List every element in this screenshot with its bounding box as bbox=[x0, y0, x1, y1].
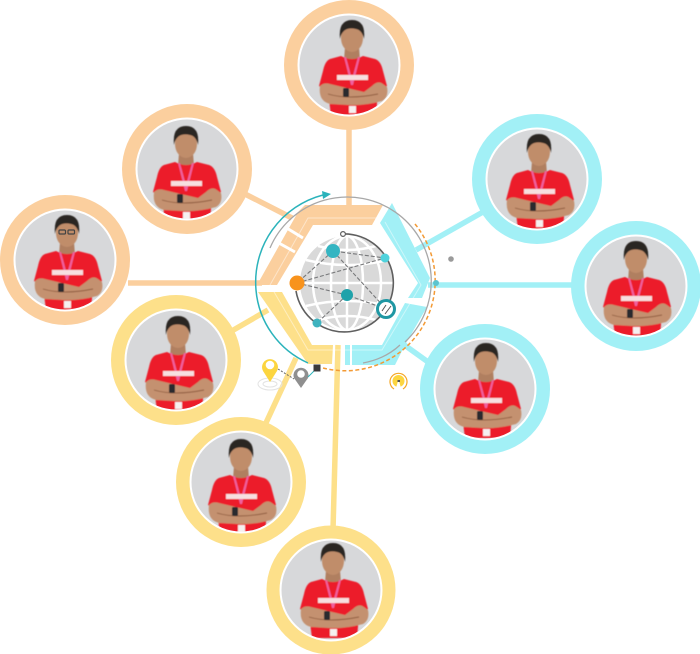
portrait: upper left bbox=[122, 104, 252, 234]
hexagon band: blue upper chevron bbox=[380, 203, 430, 298]
outer gray arc bbox=[270, 197, 431, 342]
portrait: bottom left bbox=[176, 417, 306, 547]
portrait: left bbox=[0, 195, 130, 325]
dotted link between pins bbox=[278, 369, 294, 379]
hexagon band: orange segment bbox=[257, 205, 383, 285]
network dashed links bbox=[297, 251, 386, 323]
lower gray arc bbox=[363, 345, 400, 363]
network node orange bbox=[290, 276, 304, 290]
icon: yellow map pin bbox=[258, 359, 282, 390]
hexagon band: blue lower segment bbox=[345, 303, 427, 365]
black square marker bbox=[308, 364, 320, 377]
portrait: right bbox=[571, 221, 700, 351]
network node large bbox=[326, 244, 340, 258]
portrait: bottom bbox=[266, 526, 396, 654]
small gray dot bbox=[448, 256, 454, 262]
hexagon band: yellow segment bbox=[258, 292, 333, 364]
globe bbox=[290, 232, 394, 332]
orange dashed arc bbox=[323, 224, 435, 371]
portrait: lower right bbox=[420, 324, 550, 454]
network node small right bbox=[380, 254, 390, 262]
network node ring bbox=[378, 300, 394, 318]
portrait: lower left bbox=[111, 295, 241, 425]
portrait: upper right bbox=[472, 114, 602, 244]
globe orbit arc bbox=[296, 234, 393, 332]
network node small bottom bbox=[312, 318, 322, 328]
portrait: top bbox=[284, 0, 414, 130]
icon: orange signal bbox=[390, 373, 407, 389]
network node center bbox=[341, 289, 353, 301]
connector lines bbox=[128, 128, 575, 530]
icon: gray map pin bbox=[294, 368, 309, 388]
small teal connector dot bbox=[433, 280, 439, 286]
teal arc arrow bbox=[256, 191, 331, 363]
orbit top handle bbox=[341, 232, 345, 236]
